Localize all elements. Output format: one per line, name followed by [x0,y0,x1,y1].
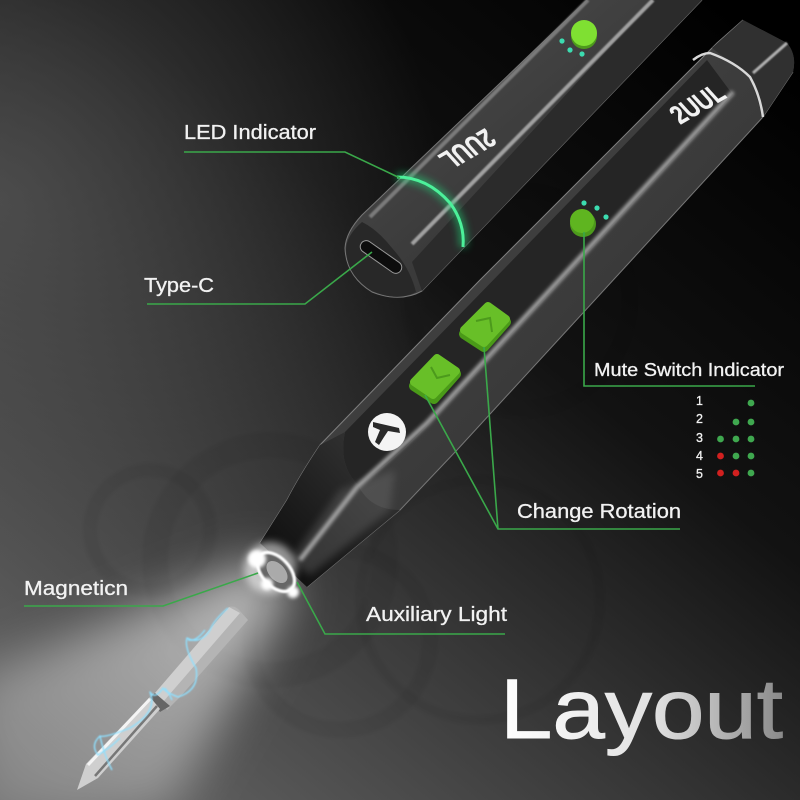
indicator table: 2 [696,412,703,426]
logo A: 2UUL [432,123,502,174]
indicator table: 1 [696,394,703,408]
end face [346,222,416,297]
logo B: 2UUL [664,79,732,130]
callout lines [24,152,755,634]
cap end [712,20,794,117]
indicator table: 4 [696,449,703,463]
indicator table: 5 [696,467,703,481]
label: Auxiliary Light: Auxiliary Light [366,604,507,626]
indicator dots A [559,38,585,57]
light beam [0,560,290,800]
label: Magneticn: Magneticn [24,578,128,600]
pen B (front, with buttons) [244,20,794,598]
screwdriver bit [77,606,248,790]
switch A [571,20,597,49]
indicator dots B [581,200,609,220]
switch B [570,209,596,237]
lightning [94,608,228,770]
label: Change Rotation: Change Rotation [517,501,681,523]
USB-C port [358,238,404,276]
button up [464,306,506,347]
screw icon [368,413,406,451]
LED ring [397,177,463,247]
button down [414,358,456,399]
lens ring with light [244,542,302,598]
background gear decoration [90,190,630,730]
label: Type-C: Type-C [144,275,214,297]
indicator table [696,394,754,481]
pen A (top, showing Type-C end) [345,0,702,297]
label: Mute Switch Indicator: Mute Switch Indicator [594,360,784,380]
title: Layout [500,662,783,756]
front face [343,60,733,485]
indicator table: 3 [696,431,703,445]
label: LED Indicator: LED Indicator [184,122,316,144]
tapered tip [260,432,400,587]
